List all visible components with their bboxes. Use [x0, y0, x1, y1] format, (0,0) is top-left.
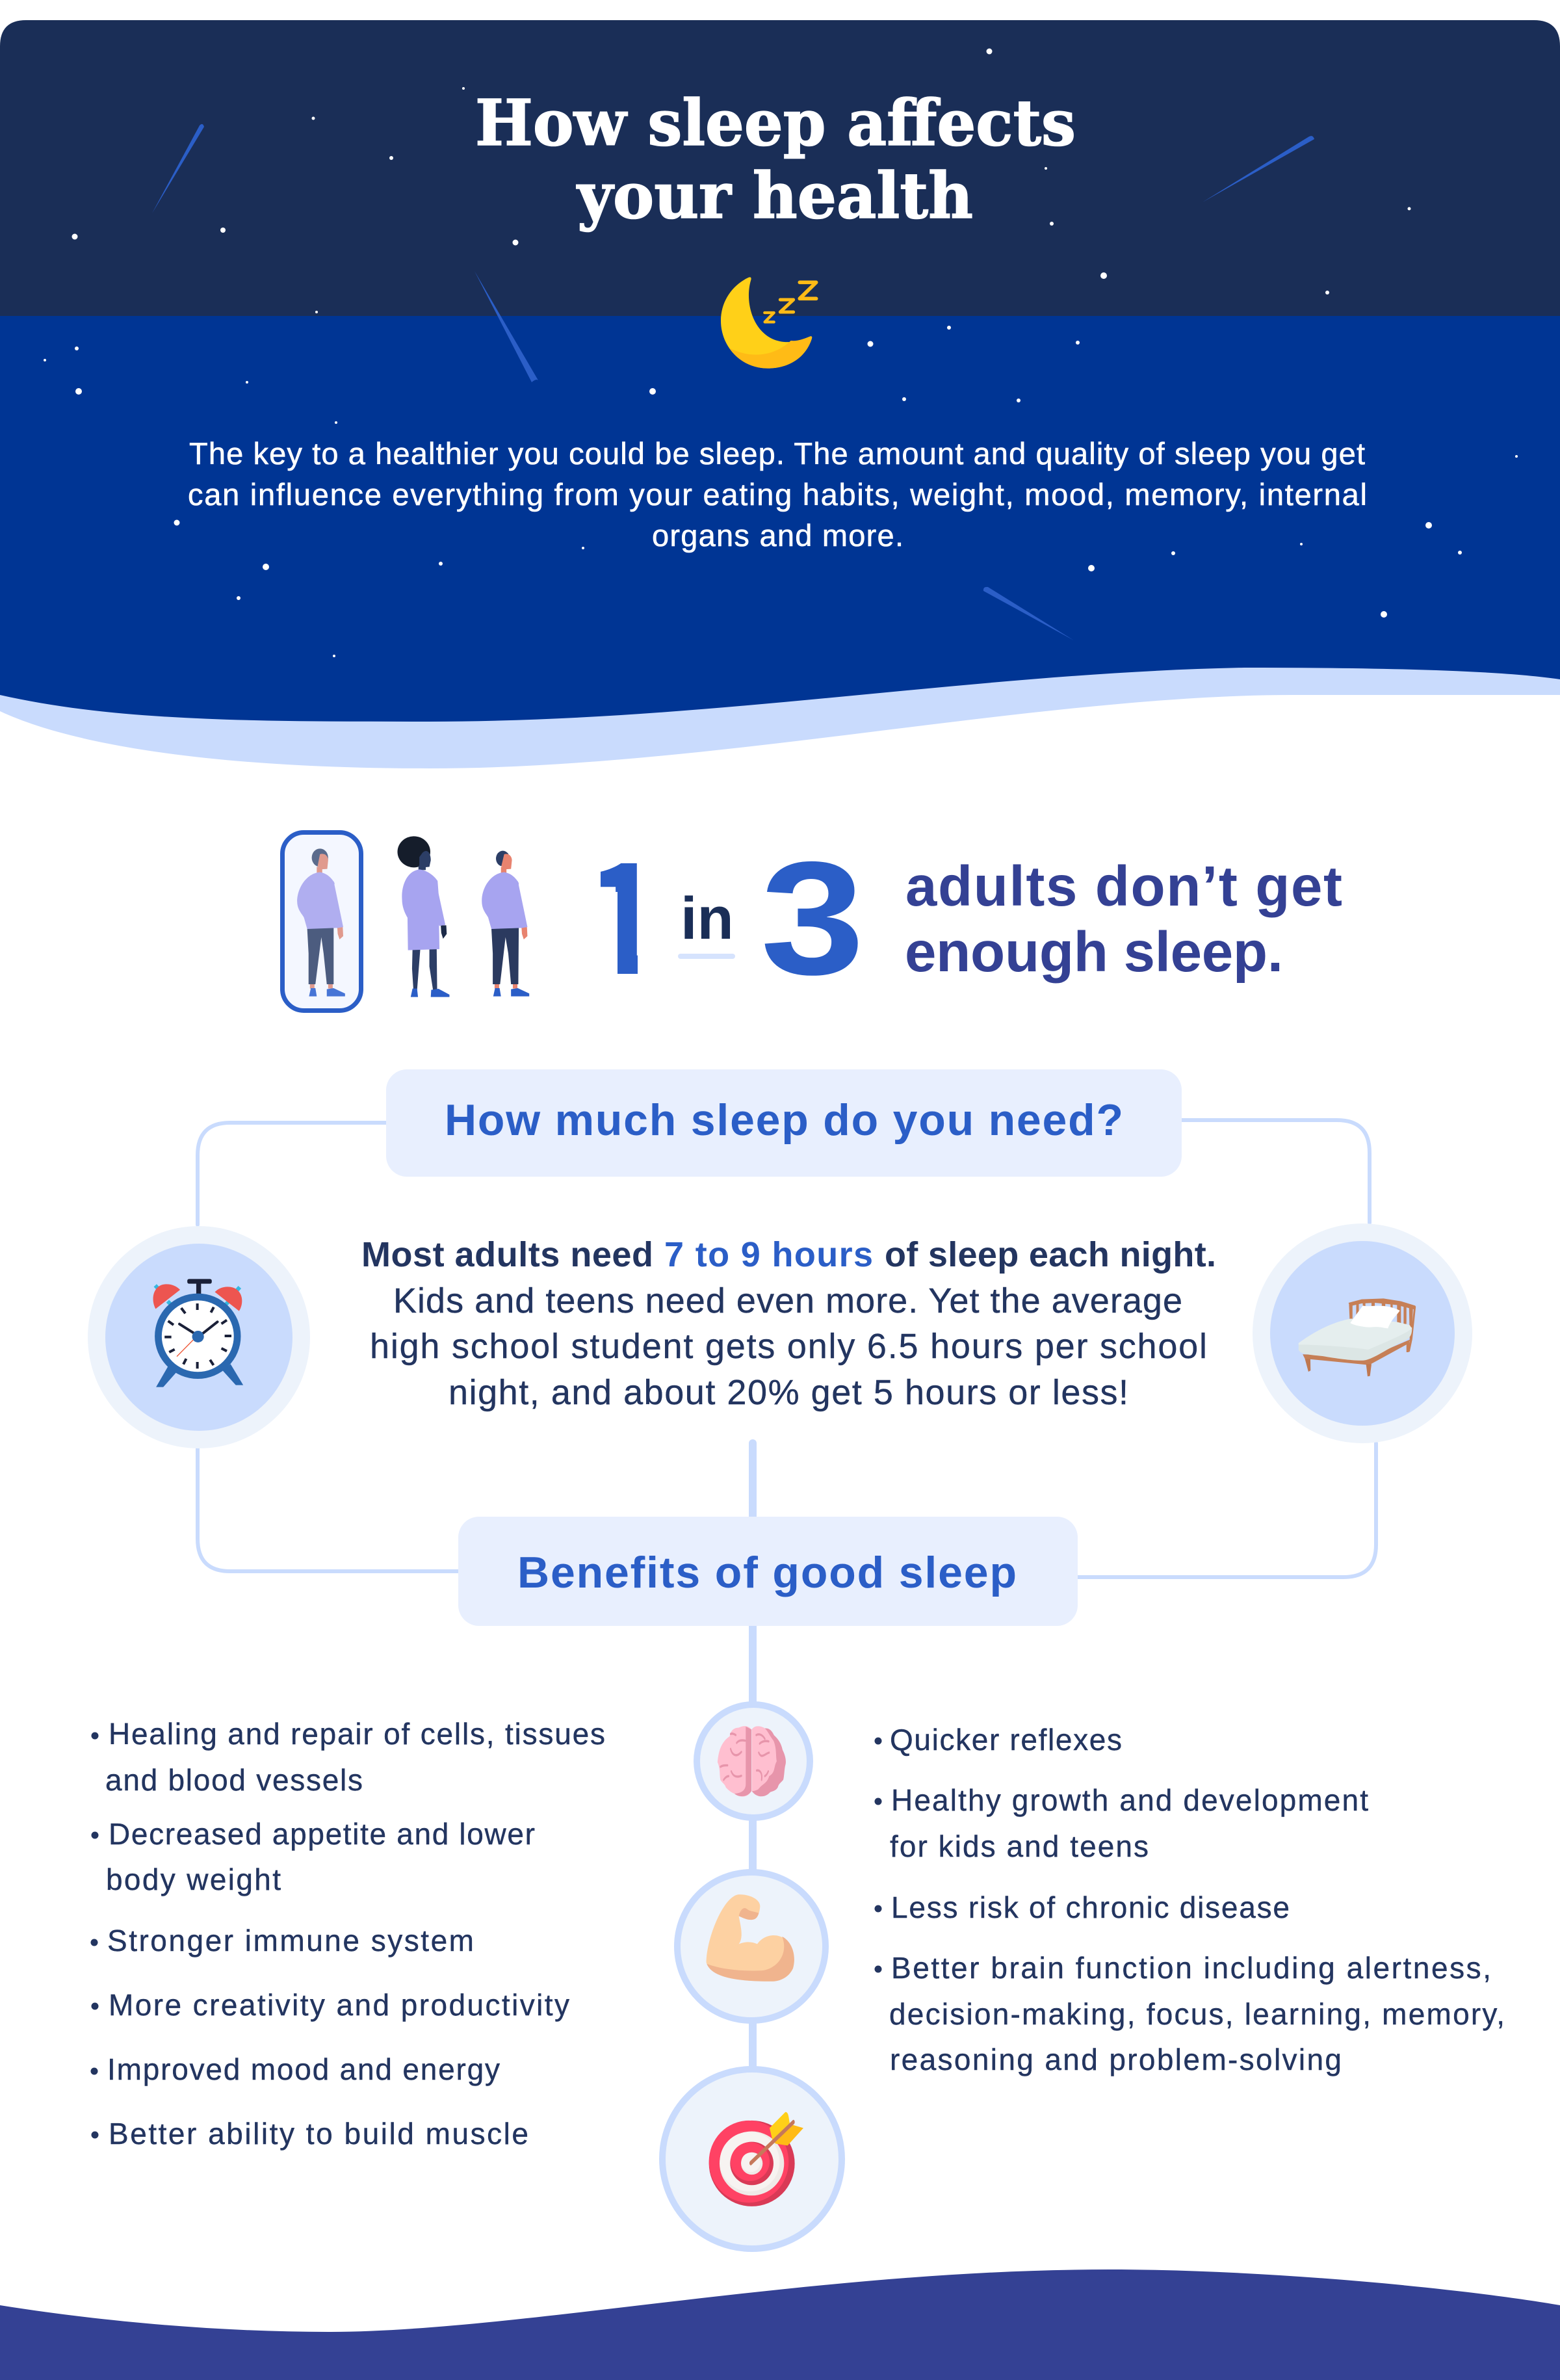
icon: brain — [697, 1705, 810, 1818]
right benefits list: Healthy growth and development — [891, 1783, 1368, 1817]
left benefits list: Stronger immune system — [107, 1924, 474, 1957]
title: your health — [576, 159, 973, 233]
intro text: organs and more. — [652, 518, 904, 553]
stat text: adults don't get enough sleep — [905, 855, 1342, 984]
text: how much sleep paragraph: Most adults need — [361, 1235, 653, 1274]
icon: flexed arm — [677, 1872, 826, 2020]
intro text: The key to a healthier you could be sleep. The amount and quality of sleep you get — [189, 436, 1365, 471]
left benefits list: Decreased appetite and lower — [109, 1817, 535, 1851]
heading box: how much sleep — [386, 1069, 1182, 1177]
deep blue sky — [0, 312, 1560, 722]
people group — [297, 836, 529, 997]
panel: night sky header — [0, 20, 1560, 768]
right benefits list: Less risk of chronic disease — [891, 1890, 1290, 1924]
text: how much sleep paragraph: Kids and teens need even more. Yet the average — [393, 1281, 1182, 1320]
left benefits list: and blood vessels — [105, 1763, 363, 1797]
right benefits list: for kids and teens — [890, 1829, 1149, 1863]
footer wave — [0, 2269, 1560, 2380]
person three — [482, 851, 529, 997]
heading box: benefits: Benefits of good sleep — [517, 1548, 1017, 1597]
right benefits list: decision-making, focus, learning, memory, — [889, 1997, 1505, 2031]
title — [475, 86, 1076, 233]
text: how much sleep paragraph: of sleep each night. — [885, 1235, 1216, 1274]
right benefits list: Quicker reflexes — [890, 1723, 1122, 1757]
people illustration: 1 in 3 — [282, 832, 529, 1010]
intro text: can influence everything from your eating habits, weight, mood, memory, internal — [188, 477, 1367, 512]
heading box: how much sleep: How much sleep do you need? — [445, 1095, 1123, 1145]
stat: 1 in 3 — [601, 861, 858, 976]
stat: 1 in 3: 1 — [580, 796, 666, 1018]
stat text: adults don't get enough sleep: adults don’t get — [905, 855, 1342, 918]
stat: 1 in 3: 3 — [760, 828, 864, 1008]
heading box: benefits — [458, 1517, 1078, 1626]
highlighted mirror frame — [282, 832, 361, 1010]
right benefits list: Better brain function including alertness, — [891, 1951, 1491, 1985]
left benefits list — [91, 1717, 605, 2151]
stat: 1 in 3: in — [681, 885, 734, 952]
left benefits list: Improved mood and energy — [107, 2052, 500, 2086]
connector lines — [198, 1120, 1376, 2074]
left benefits list: Healing and repair of cells, tissues — [109, 1717, 605, 1751]
stars — [44, 48, 1518, 657]
icon: sleeping moon — [721, 277, 816, 369]
left benefits list: body weight — [106, 1863, 281, 1896]
intro text — [188, 436, 1367, 553]
person one — [297, 848, 345, 997]
right benefits list: reasoning and problem-solving — [890, 2043, 1342, 2076]
text: how much sleep paragraph: 7 to 9 hours — [664, 1235, 873, 1274]
navy sky band — [0, 20, 1560, 316]
shooting stars — [152, 124, 1314, 640]
icon: bed — [1253, 1223, 1472, 1443]
person two — [397, 836, 449, 997]
right benefits list — [875, 1723, 1505, 2076]
left benefits list: Better ability to build muscle — [109, 2117, 528, 2151]
text: how much sleep paragraph: high school student gets only 6.5 hours per school — [370, 1327, 1207, 1366]
icon: target with arrow — [662, 2069, 842, 2249]
left benefits list: More creativity and productivity — [109, 1988, 569, 2022]
stat text: adults don't get enough sleep: enough sleep. — [905, 921, 1283, 984]
text: how much sleep paragraph — [361, 1235, 1216, 1412]
text: how much sleep paragraph: night, and about 20% get 5 hours or less! — [448, 1373, 1128, 1412]
title: How sleep affects — [475, 86, 1076, 160]
light wave — [0, 650, 1560, 768]
icon: alarm clock — [88, 1226, 310, 1448]
